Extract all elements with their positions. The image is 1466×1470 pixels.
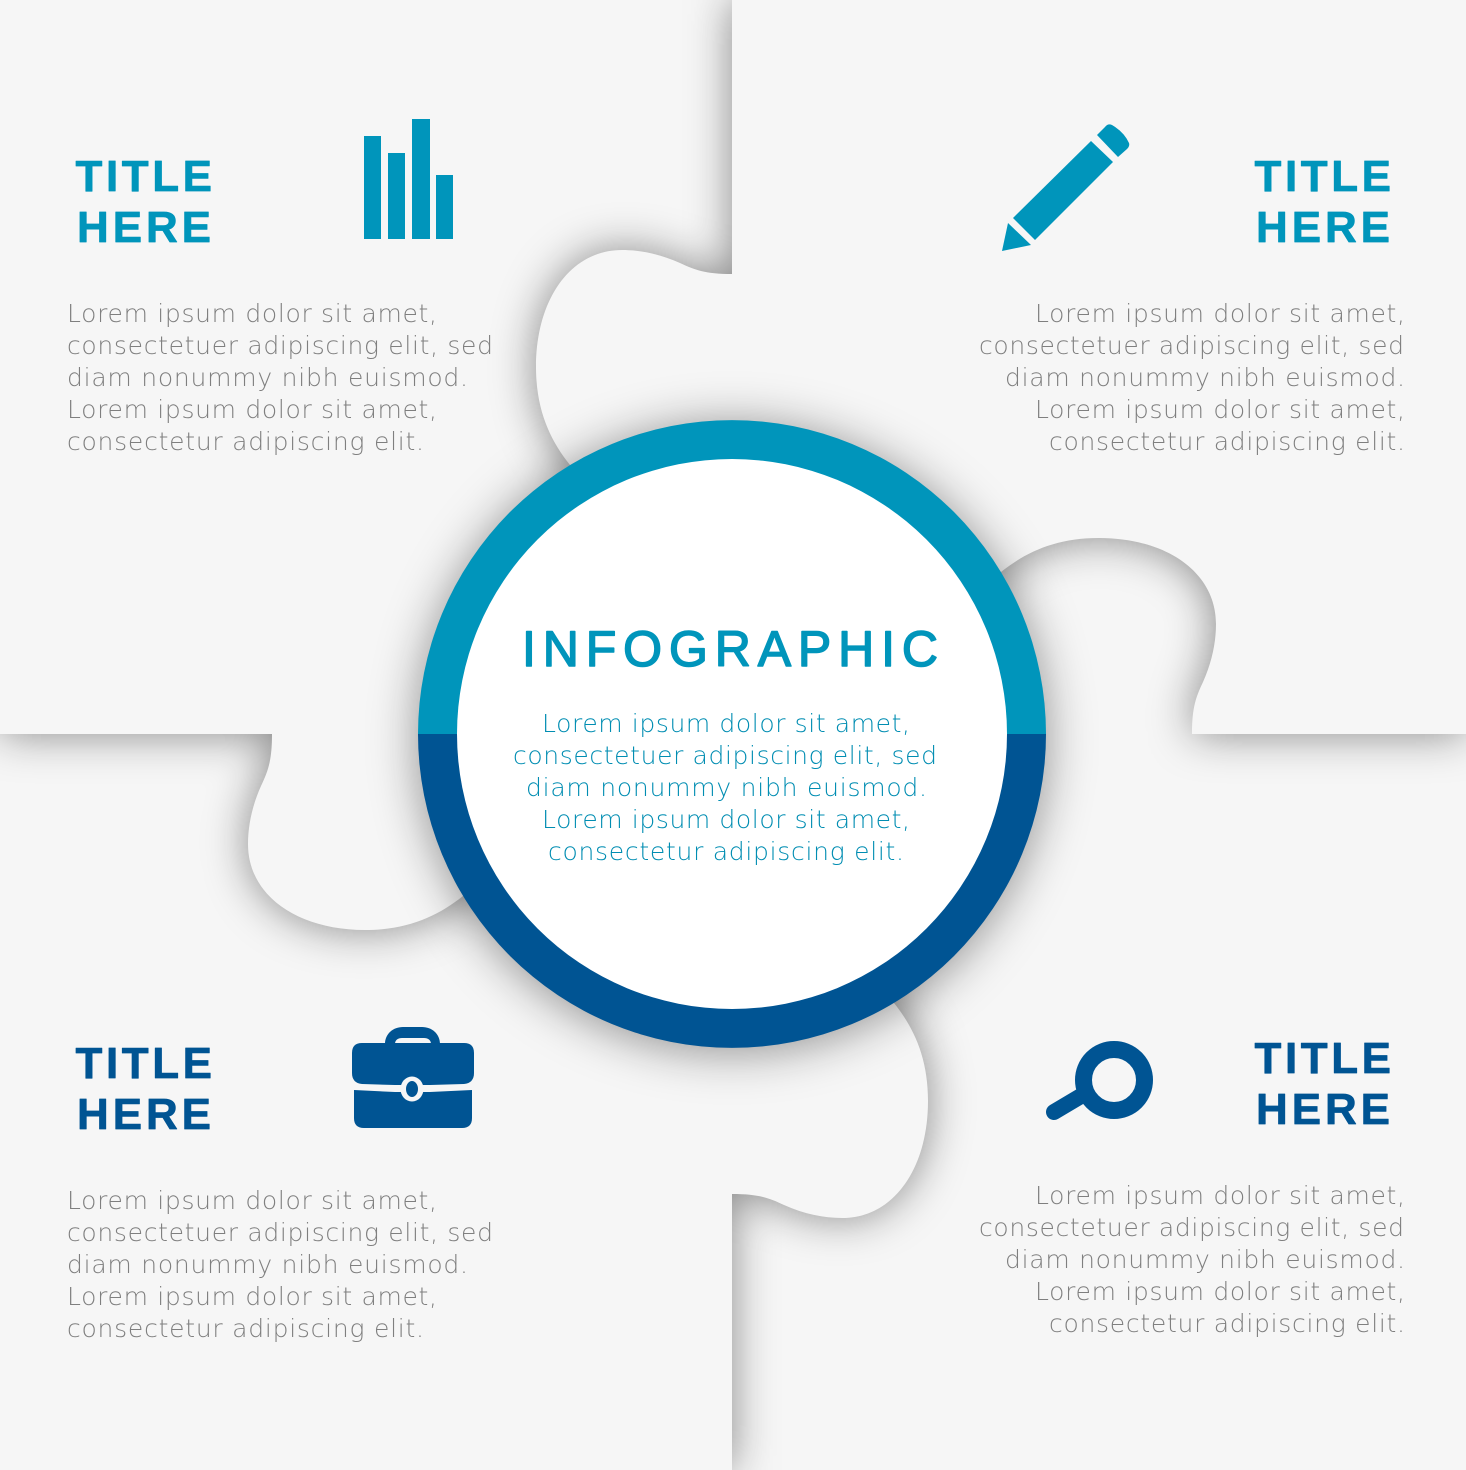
text block: bottom left: consectetuer adipiscing elit, sed: [67, 1218, 493, 1247]
heading: bottom left: [76, 1039, 212, 1139]
text block: bottom left: Lorem ipsum dolor sit amet,: [67, 1186, 437, 1215]
puzzle piece: top right with shadow: [536, 0, 1466, 734]
panel: bottom left: [67, 1027, 493, 1343]
text block: bottom left: consectetur adipiscing elit.: [67, 1314, 424, 1343]
text block: top left: consectetuer adipiscing elit, sed: [67, 331, 493, 360]
heading: top left: [76, 152, 212, 252]
central text block: diam nonummy nibh euismod.: [526, 773, 927, 802]
heading: top right: HERE: [1256, 203, 1390, 252]
text block: top right: Lorem ipsum dolor sit amet,: [1035, 395, 1405, 424]
icon: pencil: [1002, 124, 1129, 251]
text block: top left: Lorem ipsum dolor sit amet,: [67, 395, 437, 424]
text block: bottom right: consectetuer adipiscing elit, sed: [979, 1213, 1404, 1242]
text block: top left: consectetur adipiscing elit.: [67, 427, 424, 456]
icon: bar chart: [364, 119, 453, 239]
text block: top left: [67, 299, 493, 456]
central heading: INFOGRAPHIC: [522, 621, 938, 677]
text block: top right: diam nonummy nibh euismod.: [1005, 363, 1405, 392]
text block: top left: diam nonummy nibh euismod.: [67, 363, 468, 392]
text block: bottom left: diam nonummy nibh euismod.: [67, 1250, 468, 1279]
puzzle piece: top left with shadow: [0, 0, 732, 930]
text block: bottom left: [67, 1186, 493, 1343]
heading: top right: TITLE: [1254, 152, 1391, 201]
text block: bottom right: [979, 1181, 1405, 1338]
central circle: [418, 420, 1046, 1052]
heading: top left: TITLE: [76, 152, 212, 201]
central text block: Lorem ipsum dolor sit amet,: [542, 805, 910, 834]
heading: bottom left: TITLE: [76, 1039, 212, 1088]
text block: bottom right: consectetur adipiscing elit.: [1049, 1309, 1405, 1338]
heading: bottom right: [1254, 1034, 1391, 1134]
heading: top right: [1254, 152, 1391, 252]
central text block: [513, 709, 937, 866]
heading: bottom left: HERE: [77, 1090, 211, 1139]
text block: top right: consectetur adipiscing elit.: [1049, 427, 1405, 456]
heading: bottom right: TITLE: [1254, 1034, 1391, 1083]
central text block: consectetuer adipiscing elit, sed: [513, 741, 937, 770]
panel: bottom right: [979, 1034, 1405, 1338]
central text block: Lorem ipsum dolor sit amet,: [542, 709, 910, 738]
text block: bottom right: Lorem ipsum dolor sit amet,: [1035, 1181, 1405, 1210]
text block: top right: consectetuer adipiscing elit, sed: [979, 331, 1404, 360]
text block: bottom right: Lorem ipsum dolor sit amet,: [1035, 1277, 1405, 1306]
puzzle piece: bottom left with shadow: [0, 734, 928, 1470]
central text block: consectetur adipiscing elit.: [548, 837, 904, 866]
heading: bottom right: HERE: [1256, 1085, 1390, 1134]
icon: magnifying glass: [1054, 1050, 1144, 1112]
text block: top left: Lorem ipsum dolor sit amet,: [67, 299, 437, 328]
panel: top right: [979, 124, 1405, 456]
heading: top left: HERE: [77, 203, 211, 252]
text block: top right: Lorem ipsum dolor sit amet,: [1035, 299, 1405, 328]
text block: bottom right: diam nonummy nibh euismod.: [1005, 1245, 1405, 1274]
icon: briefcase: [352, 1027, 474, 1128]
panel: top left: [67, 119, 493, 456]
text block: bottom left: Lorem ipsum dolor sit amet,: [67, 1282, 437, 1311]
text block: top right: [979, 299, 1405, 456]
